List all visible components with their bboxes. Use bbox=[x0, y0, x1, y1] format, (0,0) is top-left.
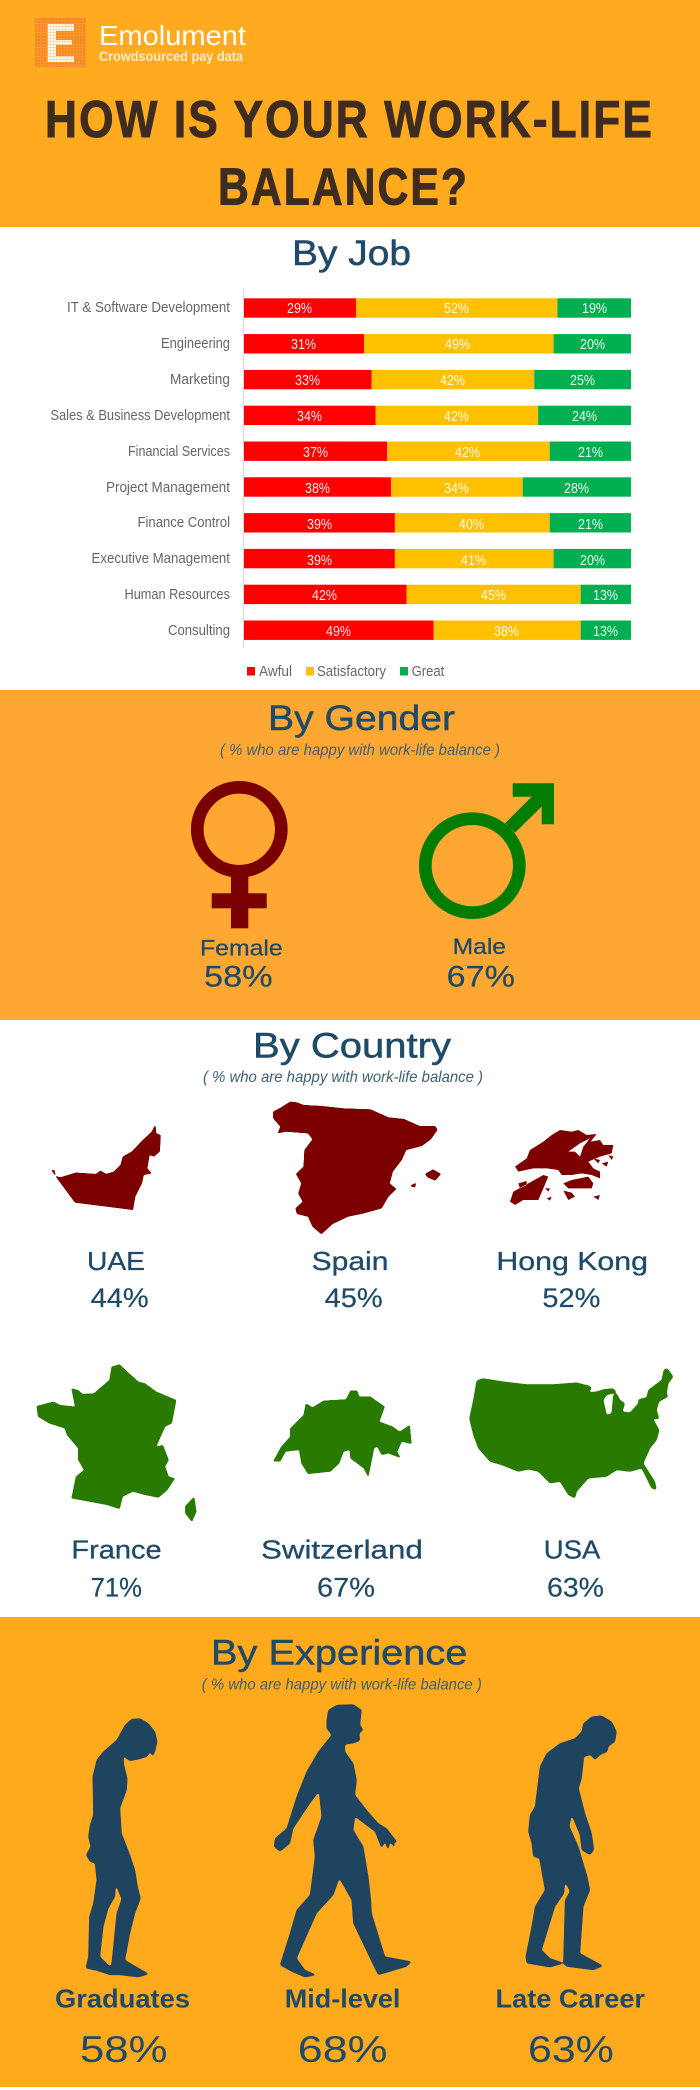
bar: Marketing bbox=[170, 370, 631, 389]
bar: Project Management bbox=[106, 477, 631, 497]
value: Mid-level: 68% bbox=[298, 2029, 388, 2070]
bar: Project Management: 38% bbox=[305, 481, 330, 497]
bar: Human Resources bbox=[124, 585, 631, 604]
map: Spain bbox=[273, 1102, 441, 1234]
logo wordmark: Emolument bbox=[99, 20, 246, 51]
value: USA: 63% bbox=[547, 1573, 604, 1603]
bar: Financial Services: Financial Services bbox=[128, 443, 230, 460]
value: Graduates: 58% bbox=[80, 2029, 167, 2070]
bar: Project Management: 28% bbox=[564, 481, 589, 497]
bar: Human Resources: 42% bbox=[312, 588, 337, 604]
bar: Human Resources: 13% bbox=[593, 588, 618, 604]
bar: Marketing: Marketing bbox=[170, 371, 230, 388]
bar: Executive Management: 39% bbox=[307, 553, 332, 569]
bar: Sales & Business Development: 24% bbox=[572, 409, 597, 425]
heading: By Experience: By Experience bbox=[211, 1634, 467, 1673]
bar: Sales & Business Development: Sales & Business Development bbox=[50, 407, 231, 424]
bar: Executive Management bbox=[92, 549, 631, 569]
chart legend: Awful bbox=[259, 663, 292, 680]
bar: Finance Control: 39% bbox=[307, 517, 332, 533]
label: Hong Kong: Hong Kong bbox=[496, 1246, 648, 1276]
bar: Finance Control: Finance Control bbox=[138, 514, 230, 531]
chart legend: Satisfactory bbox=[317, 663, 386, 680]
map: UAE bbox=[51, 1124, 161, 1210]
bar: Financial Services: 21% bbox=[578, 445, 603, 461]
bar: IT & Software Development: 52% bbox=[444, 301, 469, 317]
panel: by job bbox=[0, 227, 700, 690]
bar: Project Management: 34% bbox=[444, 481, 469, 497]
bar: Engineering: 31% bbox=[291, 337, 316, 353]
bar: Marketing: 25% bbox=[570, 373, 595, 389]
panel: by gender bbox=[0, 690, 700, 1020]
value: UAE: 44% bbox=[91, 1283, 149, 1313]
bar: Financial Services bbox=[128, 442, 631, 461]
icon: late career silhouette bbox=[526, 1716, 617, 1970]
label: Female: Female bbox=[200, 936, 283, 961]
value: Late Career: 63% bbox=[528, 2029, 614, 2070]
bar: Engineering: 49% bbox=[445, 337, 470, 353]
bar: Consulting: Consulting bbox=[168, 622, 230, 639]
logo tagline: Crowdsourced pay data bbox=[99, 49, 243, 64]
label: UAE: UAE bbox=[87, 1246, 145, 1276]
bar: Finance Control: 21% bbox=[578, 517, 603, 533]
label: France: France bbox=[71, 1535, 162, 1565]
map: USA bbox=[469, 1368, 673, 1498]
bar: Marketing: 33% bbox=[295, 373, 320, 389]
icon: male symbol bbox=[425, 783, 554, 913]
value: Switzerland: 67% bbox=[317, 1573, 375, 1603]
bar: Engineering bbox=[161, 334, 631, 354]
heading: By Job: By Job bbox=[292, 234, 411, 273]
bar: IT & Software Development bbox=[67, 298, 631, 318]
bar: Human Resources: Human Resources bbox=[124, 586, 230, 603]
bar: Executive Management: Executive Management bbox=[92, 550, 231, 567]
stacked bar chart bbox=[50, 289, 631, 648]
bar: Consulting: 13% bbox=[593, 624, 618, 640]
label: Male: Male bbox=[453, 934, 506, 959]
bar: Finance Control: 40% bbox=[459, 517, 484, 533]
heading: By Gender: By Gender bbox=[268, 699, 455, 738]
value: Hong Kong: 52% bbox=[542, 1283, 600, 1313]
icon: graduate silhouette bbox=[86, 1718, 157, 1977]
experience subtitle: ( % who are happy with work-life balance ) bbox=[202, 1677, 482, 1694]
bar: Sales & Business Development: 34% bbox=[297, 409, 322, 425]
label: Mid-level: Mid-level bbox=[285, 1984, 400, 2014]
panel: header bbox=[0, 0, 700, 227]
bar: Project Management: Project Management bbox=[106, 479, 231, 496]
bar: Marketing: 42% bbox=[440, 373, 465, 389]
value: Male: 67% bbox=[447, 961, 515, 994]
bar: Executive Management: 20% bbox=[580, 553, 605, 569]
title: BALANCE? bbox=[218, 158, 469, 216]
label: Late Career: Late Career bbox=[496, 1984, 645, 2014]
heading: By Country: By Country bbox=[253, 1027, 452, 1066]
value: France: 71% bbox=[91, 1573, 142, 1603]
bar: Sales & Business Development: 42% bbox=[444, 409, 469, 425]
bar: Consulting: 49% bbox=[326, 624, 351, 640]
map: Hong Kong bbox=[510, 1130, 613, 1205]
map: Switzerland bbox=[273, 1391, 412, 1477]
gender subtitle: ( % who are happy with work-life balance ) bbox=[220, 742, 500, 759]
bar: Engineering: Engineering bbox=[161, 335, 230, 352]
chart legend bbox=[247, 663, 445, 680]
map: France bbox=[37, 1364, 196, 1522]
label: Spain: Spain bbox=[312, 1246, 388, 1276]
panel: by experience bbox=[0, 1617, 700, 2087]
label: USA: USA bbox=[544, 1535, 601, 1565]
bar: Human Resources: 45% bbox=[481, 588, 506, 604]
icon: mid-level silhouette bbox=[274, 1704, 412, 1977]
bar: Executive Management: 41% bbox=[461, 553, 486, 569]
bar: Sales & Business Development bbox=[50, 406, 631, 425]
bar: IT & Software Development: 29% bbox=[287, 301, 312, 317]
bar: Consulting: 38% bbox=[494, 624, 519, 640]
bar: IT & Software Development: IT & Software Development bbox=[67, 299, 231, 316]
title bbox=[45, 91, 654, 216]
bar: Financial Services: 42% bbox=[455, 445, 480, 461]
icon: Emolument logo bbox=[35, 18, 86, 67]
country subtitle: ( % who are happy with work-life balance ) bbox=[203, 1069, 483, 1086]
bar: Engineering: 20% bbox=[580, 337, 605, 353]
chart legend: Great bbox=[412, 663, 445, 680]
label: Graduates: Graduates bbox=[55, 1984, 190, 2014]
value: Spain: 45% bbox=[325, 1283, 383, 1313]
bar: Finance Control bbox=[138, 513, 631, 533]
label: Switzerland: Switzerland bbox=[261, 1535, 423, 1565]
value: Female: 58% bbox=[204, 961, 273, 994]
panel: by country bbox=[0, 1020, 700, 1617]
bar: Financial Services: 37% bbox=[303, 445, 328, 461]
bar: Consulting bbox=[168, 620, 631, 640]
bar: IT & Software Development: 19% bbox=[582, 301, 607, 317]
icon: female symbol bbox=[197, 787, 281, 928]
